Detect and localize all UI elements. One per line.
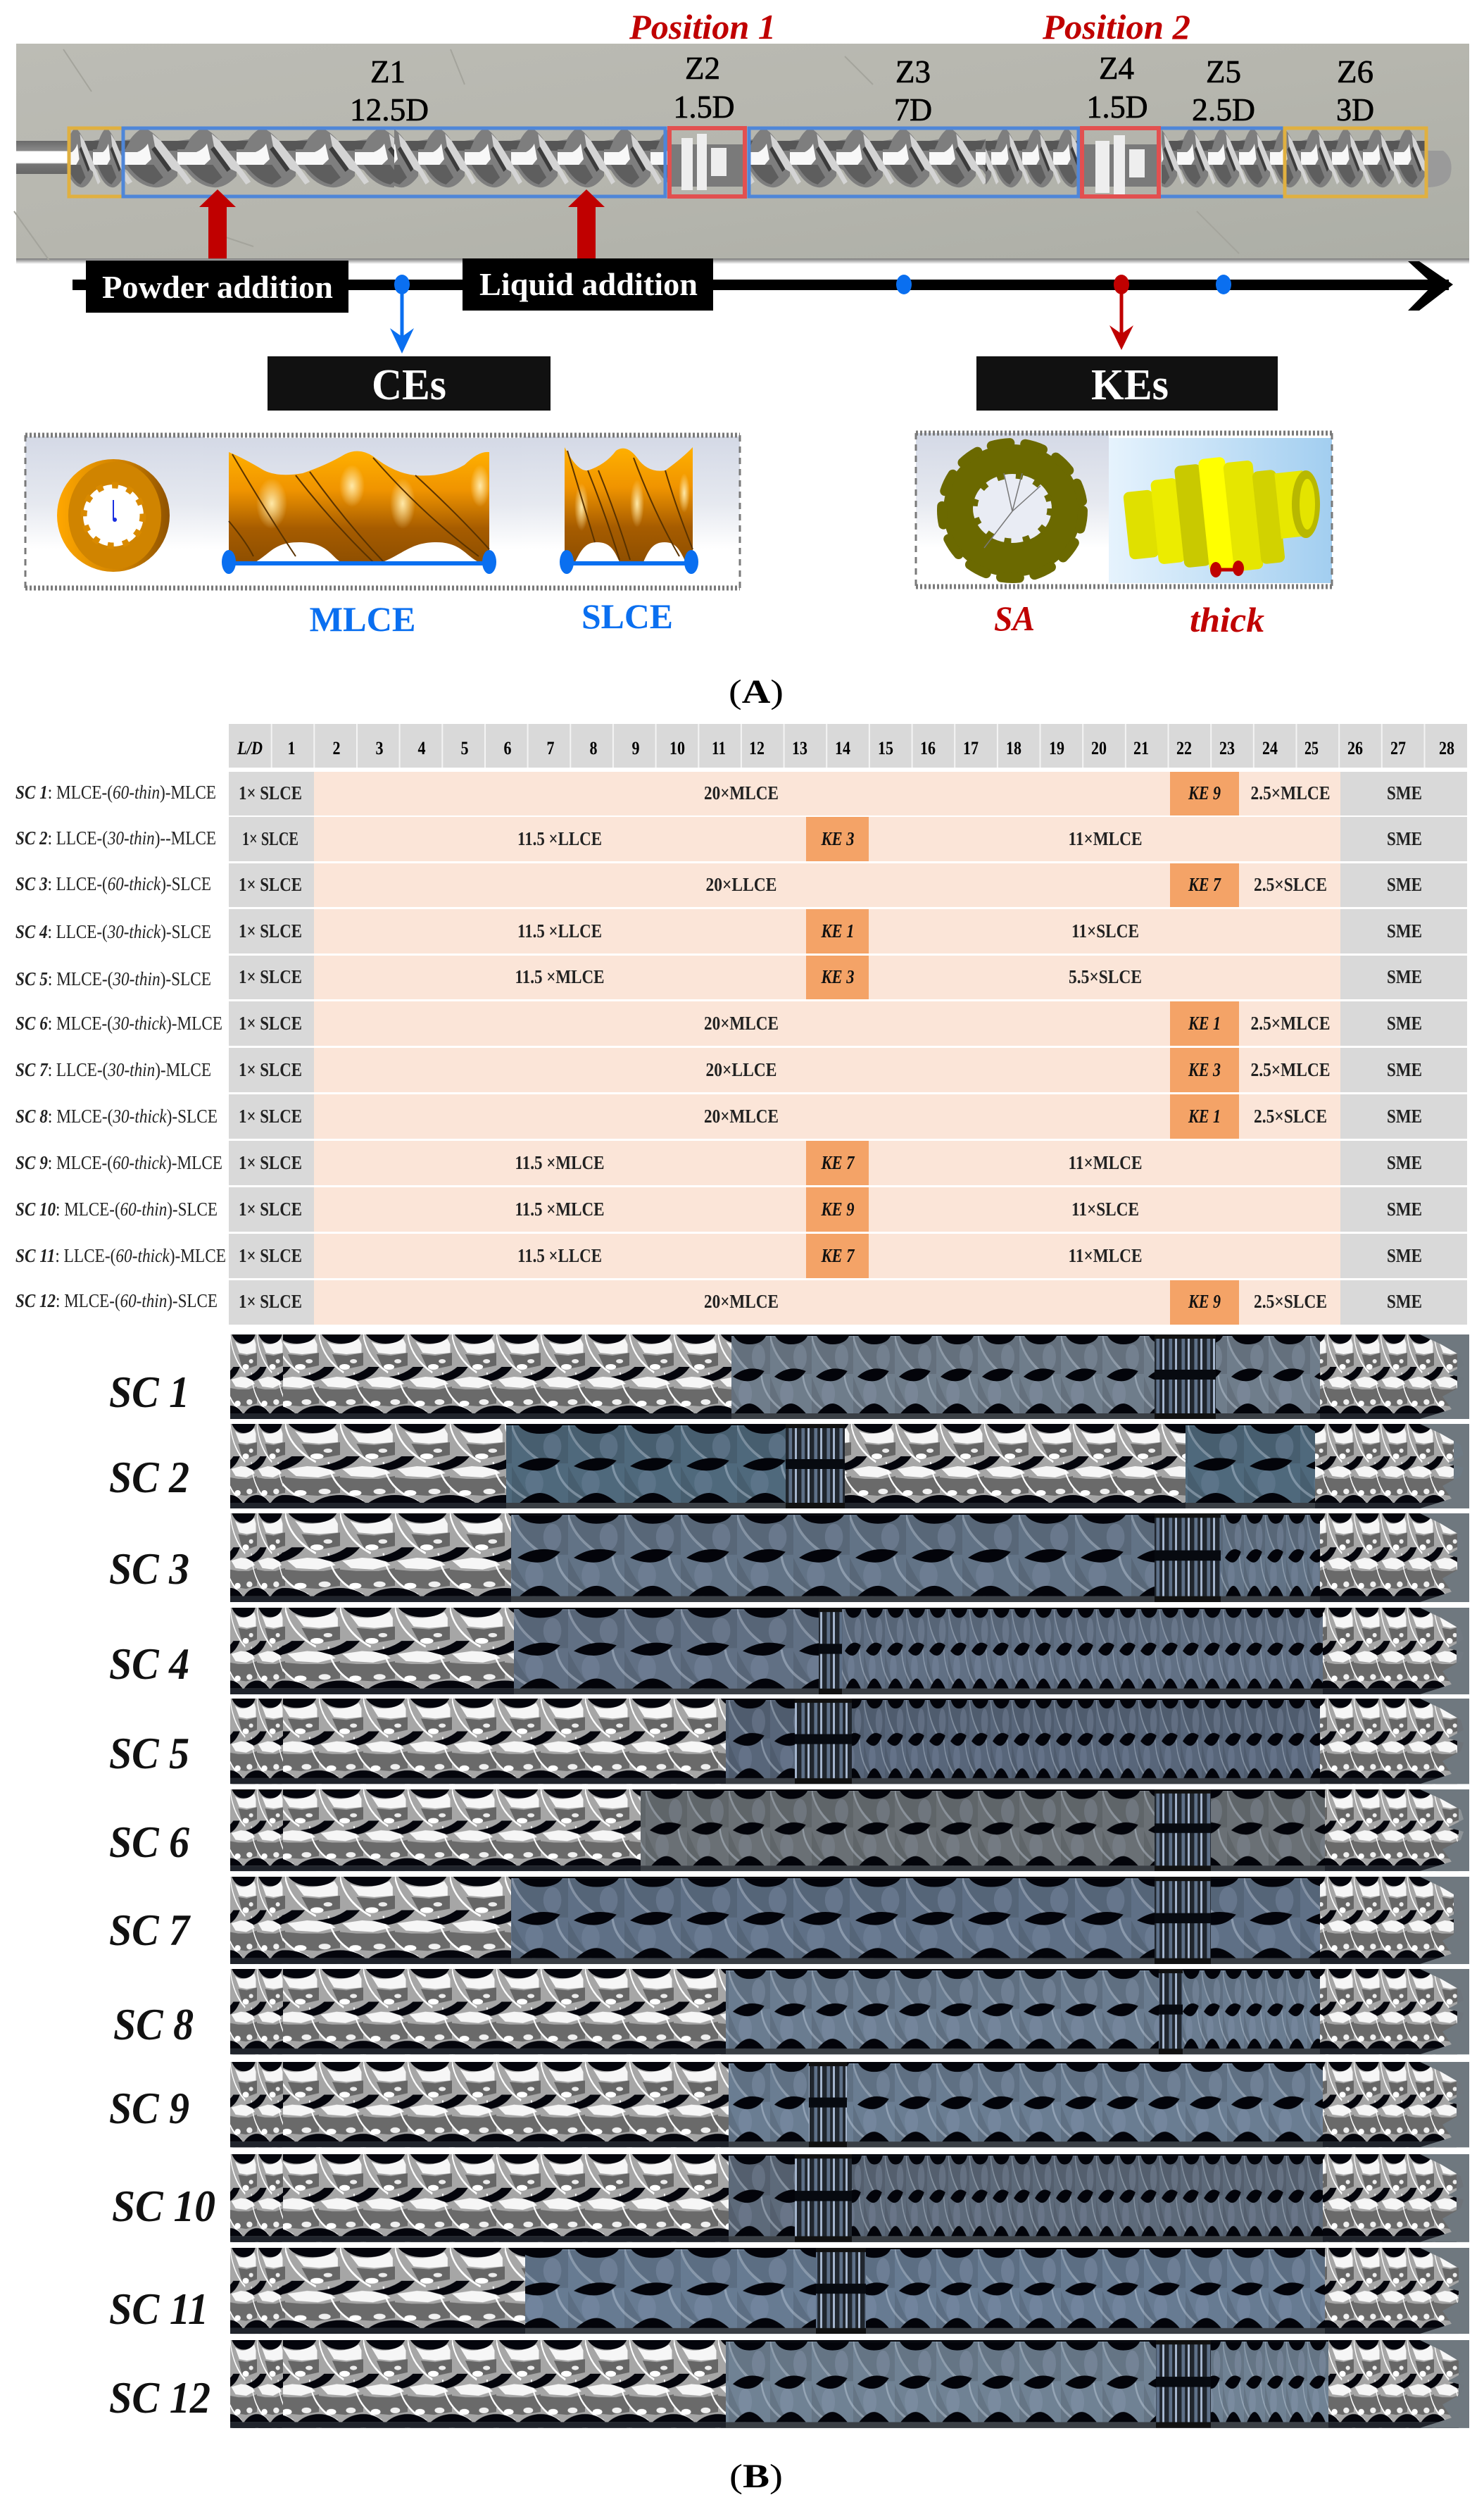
table: header row: 8 — [590, 738, 597, 758]
table: header row: 24 — [1262, 738, 1278, 758]
label: Liquid addition — [463, 258, 713, 311]
table row: SC 2: 11.5 ×LLCE — [517, 828, 602, 849]
table row: SC 2 — [15, 817, 1467, 861]
table row: SC 4: 11.5 ×LLCE — [517, 920, 602, 942]
table row: SC 9: KE 7 — [821, 1152, 855, 1173]
caption (B): (B) — [729, 2458, 783, 2495]
zone label Z4: Z4 — [1099, 51, 1134, 86]
label: SA: SA — [994, 599, 1035, 638]
photo strip: SC 6 — [230, 1789, 1469, 1871]
label: SC 10: SC 10 — [112, 2181, 215, 2231]
table row: SC 1 — [15, 772, 1467, 815]
icon: thick kneading element — [1123, 456, 1320, 577]
table: header row: 4 — [418, 738, 425, 758]
table row: SC 7: 2.5×MLCE — [1250, 1059, 1331, 1080]
table row: SC 6 — [15, 1001, 1467, 1046]
table row: SC 6: 20×MLCE — [704, 1013, 779, 1034]
photo strip: SC 5 — [230, 1699, 1469, 1784]
zone label Z6: 3D — [1336, 92, 1374, 127]
table: header row: 9 — [632, 738, 639, 758]
table row: SC 8: KE 1 — [1188, 1106, 1221, 1127]
table row: SC 11: SC 11: LLCE-(60-thick)-MLCE — [15, 1245, 226, 1266]
zone label Z5 — [1192, 54, 1255, 127]
table row: SC 12: SC 12: MLCE-(60-thin)-SLCE — [15, 1290, 218, 1311]
photo strip: SC 11 — [230, 2248, 1469, 2334]
label: CEs — [268, 356, 551, 411]
table row: SC 8: 2.5×SLCE — [1254, 1106, 1327, 1127]
table: header row: 25 — [1304, 738, 1319, 758]
table row: SC 2: KE 3 — [821, 828, 855, 849]
arrow: down to CEs — [390, 290, 414, 354]
table row: SC 1: SME — [1387, 782, 1422, 804]
label: KEs: KEs — [1091, 361, 1169, 409]
table row: SC 9: 1× SLCE — [239, 1152, 302, 1173]
zone label Z1 — [350, 54, 429, 127]
panel: conveying elements — [25, 435, 740, 588]
table: header row: 3 — [376, 738, 383, 758]
zone label Z2: Z2 — [685, 51, 720, 86]
table: header row: 2 — [332, 738, 341, 758]
table: header row: 20 — [1091, 738, 1107, 758]
zone label Z3: Z3 — [895, 54, 931, 89]
table row: SC 7: 1× SLCE — [239, 1059, 302, 1080]
table row: SC 6: 2.5×MLCE — [1250, 1013, 1331, 1034]
table row: SC 11: 11.5 ×LLCE — [517, 1245, 602, 1266]
table row: SC 12: 1× SLCE — [239, 1291, 302, 1312]
table: header row: 22 — [1176, 738, 1192, 758]
table row: SC 11: 11×MLCE — [1069, 1245, 1142, 1266]
table: header row: L/D — [237, 738, 263, 758]
table row: SC 3: 1× SLCE — [239, 874, 302, 895]
zone label Z2 — [673, 51, 735, 125]
table row: SC 1: 20×MLCE — [704, 782, 779, 804]
label: SC 9: SC 9 — [109, 2083, 189, 2133]
table row: SC 7: 20×LLCE — [705, 1059, 777, 1080]
heading: Position 1: Position 1 — [629, 7, 776, 46]
zone boxes — [69, 128, 1426, 196]
table row: SC 2: 1× SLCE — [242, 828, 298, 849]
table row: SC 4: 11×SLCE — [1071, 920, 1139, 942]
heading: Position 2: Position 2 — [1042, 7, 1190, 46]
table: header row: 17 — [963, 738, 979, 758]
arrow: liquid feed — [568, 189, 605, 258]
table row: SC 9: SC 9: MLCE-(60-thick)-MLCE — [15, 1152, 222, 1173]
zone label Z1: Z1 — [370, 54, 405, 89]
icon: end-on view of element — [57, 459, 170, 572]
table: header row: 1 — [287, 738, 296, 758]
label: Liquid addition: Liquid addition — [479, 267, 698, 302]
table row: SC 7 — [15, 1048, 1467, 1092]
table row: SC 6: 1× SLCE — [239, 1013, 302, 1034]
panel: photo of the screw with zones — [14, 44, 1469, 264]
table: header row: 26 — [1347, 738, 1363, 758]
table row: SC 3: SME — [1387, 874, 1422, 895]
table row: SC 1: KE 9 — [1188, 782, 1221, 804]
table row: SC 6: KE 1 — [1188, 1013, 1221, 1034]
table: header row: 18 — [1006, 738, 1021, 758]
arrow: powder feed — [199, 189, 236, 258]
zone label Z3: 7D — [894, 92, 932, 127]
table: header row: 12 — [749, 738, 765, 758]
zone label Z6: Z6 — [1337, 54, 1373, 89]
zone label Z6 — [1336, 54, 1374, 127]
table row: SC 5: 1× SLCE — [239, 966, 302, 987]
zone label Z1: 12.5D — [350, 92, 429, 127]
table row: SC 4: KE 1 — [821, 920, 855, 942]
zone label Z3 — [894, 54, 932, 127]
zone label Z5: 2.5D — [1192, 92, 1255, 127]
icon: SA staggering angle view — [942, 443, 1083, 578]
photo strip: SC 10 — [230, 2154, 1469, 2242]
label: Powder addition: Powder addition — [102, 270, 333, 305]
table: header row: 28 — [1439, 738, 1454, 758]
table: header row: 21 — [1133, 738, 1149, 758]
table row: SC 10: SME — [1387, 1199, 1422, 1220]
label: CEs: CEs — [372, 361, 446, 409]
table: header row: 23 — [1219, 738, 1235, 758]
table row: SC 3: SC 3: LLCE-(60-thick)-SLCE — [15, 873, 211, 894]
table row: SC 8: SME — [1387, 1106, 1422, 1127]
photo strip: SC 3 — [230, 1513, 1469, 1602]
table row: SC 11: KE 7 — [821, 1245, 855, 1266]
table row: SC 8 — [15, 1094, 1467, 1139]
table row: SC 1: 1× SLCE — [239, 782, 302, 804]
table row: SC 5: 5.5×SLCE — [1069, 966, 1142, 987]
arrow: down to KEs — [1109, 290, 1133, 350]
table row: SC 4: 1× SLCE — [239, 920, 302, 942]
photo strip: SC 1 — [230, 1334, 1469, 1419]
label: SC 11: SC 11 — [109, 2284, 208, 2334]
table: header row: 7 — [546, 738, 555, 758]
label: thick: thick — [1190, 600, 1264, 639]
table row: SC 5: SC 5: MLCE-(30-thin)-SLCE — [15, 968, 211, 989]
photo strip: SC 4 — [230, 1608, 1469, 1694]
label: MLCE: MLCE — [310, 599, 415, 639]
label: SC 6: SC 6 — [109, 1817, 189, 1867]
table: header row: 16 — [920, 738, 936, 758]
table row: SC 10: KE 9 — [821, 1199, 855, 1220]
table row: SC 12: 2.5×SLCE — [1254, 1291, 1327, 1312]
table row: SC 5: 11.5 ×MLCE — [515, 966, 604, 987]
photo strip: SC 9 — [230, 2062, 1469, 2147]
table row: SC 2: SME — [1387, 828, 1422, 849]
table row: SC 10 — [15, 1187, 1467, 1232]
label: SLCE: SLCE — [581, 596, 673, 636]
table row: SC 5: KE 3 — [821, 966, 855, 987]
table: header row: 27 — [1390, 738, 1406, 758]
label: SC 2: SC 2 — [109, 1452, 189, 1502]
icon: photographed screw shaft and flights — [16, 127, 1452, 194]
photo strip: SC 8 — [230, 1969, 1469, 2054]
zone label Z5: Z5 — [1206, 54, 1241, 89]
table: header row: 11 — [712, 738, 726, 758]
panel: kneading elements — [916, 433, 1332, 587]
table row: SC 4: SC 4: LLCE-(30-thick)-SLCE — [15, 921, 211, 942]
table row: SC 7: KE 3 — [1188, 1059, 1221, 1080]
label: SC 1: SC 1 — [109, 1367, 189, 1417]
table row: SC 10: 11×SLCE — [1071, 1199, 1139, 1220]
table row: SC 11 — [15, 1234, 1467, 1278]
label: SC 3: SC 3 — [109, 1544, 189, 1594]
table: header row: 14 — [835, 738, 850, 758]
table: header row: 15 — [878, 738, 893, 758]
table row: SC 12: SME — [1387, 1291, 1422, 1312]
table row: SC 5: SME — [1387, 966, 1422, 987]
arrow: main timeline — [73, 261, 1453, 311]
timeline markers — [394, 275, 1231, 294]
label: Powder addition — [86, 261, 348, 313]
table row: SC 3: 2.5×SLCE — [1254, 874, 1327, 895]
table row: SC 9: 11×MLCE — [1069, 1152, 1142, 1173]
photo strip: SC 7 — [230, 1877, 1469, 1964]
table row: SC 10: SC 10: MLCE-(60-thin)-SLCE — [15, 1199, 218, 1220]
table row: SC 12: 20×MLCE — [704, 1291, 779, 1312]
table row: SC 4: SME — [1387, 920, 1422, 942]
table row: SC 11: SME — [1387, 1245, 1422, 1266]
table row: SC 6: SME — [1387, 1013, 1422, 1034]
table: header row: 6 — [504, 738, 511, 758]
zone label Z2: 1.5D — [673, 89, 735, 125]
table row: SC 3 — [15, 863, 1467, 907]
table: header row — [229, 724, 1467, 768]
table row: SC 2: SC 2: LLCE-(30-thin)--MLCE — [15, 827, 216, 849]
table row: SC 4 — [15, 909, 1467, 954]
table row: SC 5 — [15, 956, 1467, 999]
table row: SC 10: 11.5 ×MLCE — [515, 1199, 604, 1220]
table row: SC 8: 20×MLCE — [704, 1106, 779, 1127]
photo strip: SC 12 — [230, 2340, 1469, 2428]
icon: MLCE element — [222, 451, 496, 574]
table row: SC 9: 11.5 ×MLCE — [515, 1152, 604, 1173]
label: SC 7: SC 7 — [109, 1905, 191, 1955]
table row: SC 7: SC 7: LLCE-(30-thin)-MLCE — [15, 1059, 211, 1080]
table row: SC 1: 2.5×MLCE — [1250, 782, 1331, 804]
label: SC 5: SC 5 — [109, 1728, 189, 1778]
icon: SLCE element — [560, 447, 698, 574]
table row: SC 9 — [15, 1141, 1467, 1185]
table row: SC 2: 11×MLCE — [1069, 828, 1142, 849]
table row: SC 10: 1× SLCE — [239, 1199, 302, 1220]
photo strip: SC 2 — [230, 1424, 1469, 1508]
zone label Z4 — [1087, 51, 1147, 125]
table row: SC 3: 20×LLCE — [705, 874, 777, 895]
table: header row: 19 — [1049, 738, 1064, 758]
table row: SC 3: KE 7 — [1188, 874, 1221, 895]
label: SC 12: SC 12 — [109, 2372, 210, 2422]
table: header row: 5 — [460, 738, 469, 758]
label: SC 8: SC 8 — [113, 1999, 194, 2049]
table row: SC 8: 1× SLCE — [239, 1106, 302, 1127]
dotted frame — [25, 435, 740, 588]
table row: SC 12: KE 9 — [1188, 1291, 1221, 1312]
table row: SC 7: SME — [1387, 1059, 1422, 1080]
label: SC 4: SC 4 — [109, 1639, 189, 1689]
table row: SC 9: SME — [1387, 1152, 1422, 1173]
table row: SC 8: SC 8: MLCE-(30-thick)-SLCE — [15, 1106, 218, 1127]
table row: SC 1: SC 1: MLCE-(60-thin)-MLCE — [15, 782, 216, 803]
label: KEs — [976, 356, 1278, 411]
table row: SC 11: 1× SLCE — [239, 1245, 302, 1266]
table row: SC 12 — [15, 1280, 1467, 1325]
table row: SC 6: SC 6: MLCE-(30-thick)-MLCE — [15, 1013, 222, 1034]
zone label Z4: 1.5D — [1087, 89, 1147, 125]
caption (A): (A) — [729, 673, 784, 711]
table: header row: 10 — [669, 738, 685, 758]
table: header row: 13 — [792, 738, 807, 758]
